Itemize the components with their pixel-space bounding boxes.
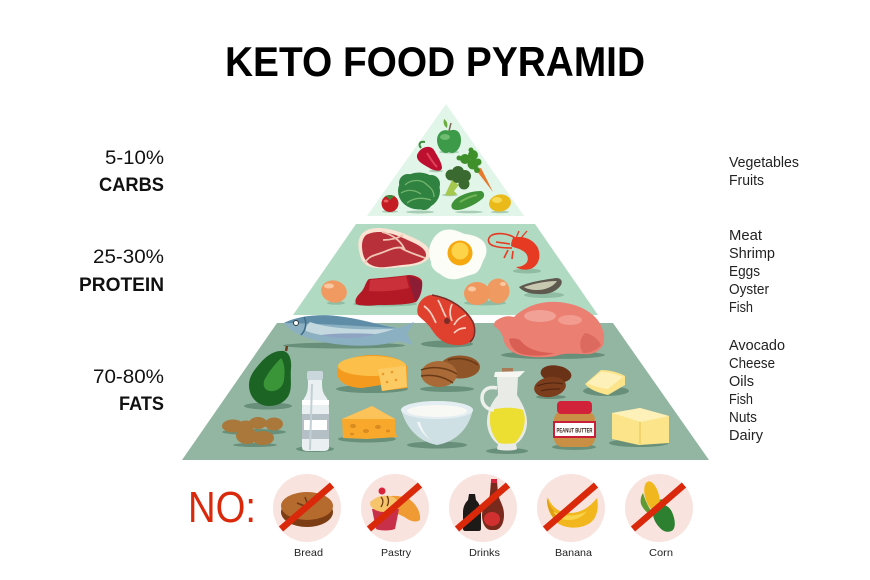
protein percentage label <box>79 247 164 296</box>
icon: almonds <box>533 363 573 400</box>
icon: lemon <box>488 193 512 213</box>
protein food list <box>729 228 775 316</box>
no item: banana: Banana <box>555 547 592 559</box>
fats food list: Avocado <box>729 338 785 354</box>
icon: raw chicken <box>494 302 605 359</box>
icon: salmon steak <box>417 295 475 348</box>
fats food list <box>729 338 785 444</box>
icon: peanuts <box>222 417 286 447</box>
icon: peanut butter jar: PEANUT BUTTER <box>556 428 593 434</box>
pyramid tier: carbs <box>367 104 524 216</box>
fats percentage label <box>93 367 164 415</box>
icon: butter small <box>583 370 629 396</box>
icon: broccoli <box>442 166 471 196</box>
pyramid tier: fats <box>182 295 709 460</box>
title: KETO FOOD PYRAMID <box>225 38 645 85</box>
protein food list: Meat <box>729 228 762 244</box>
icon: fried egg <box>429 229 486 279</box>
icon: shrimp <box>488 231 541 274</box>
icon: cheese wheel <box>336 355 408 393</box>
icon: two eggs <box>464 278 510 306</box>
no item: bread: Bread <box>294 547 323 559</box>
carbs percentage label <box>99 148 164 196</box>
protein food list: Shrimp <box>729 246 775 262</box>
fats food list: Fish <box>729 392 753 408</box>
icon: marbled steak <box>358 228 430 268</box>
fats food list: Oils <box>729 374 754 390</box>
fats food list: Cheese <box>729 356 775 372</box>
pyramid tier: protein <box>293 224 598 315</box>
fats food list: Nuts <box>729 410 757 426</box>
icon: apple <box>437 119 461 154</box>
icon: cabbage <box>398 172 440 214</box>
protein food list: Fish <box>729 300 753 316</box>
no item: corn: Corn <box>649 547 673 559</box>
carbs food list: Fruits <box>729 173 764 189</box>
icon: oyster <box>519 278 564 298</box>
icon: butter block <box>609 408 669 447</box>
icon: milk bottle <box>296 371 334 452</box>
carbs food list: Vegetables <box>729 155 799 171</box>
no item: pastry: Pastry <box>381 547 412 559</box>
icon: red beef cut <box>353 275 422 306</box>
carbs percentage label: CARBS <box>99 175 164 196</box>
fats percentage label: FATS <box>119 394 164 415</box>
protein food list: Eggs <box>729 264 760 280</box>
icon: cheese wedge <box>338 406 397 442</box>
carbs food list <box>729 155 799 189</box>
carbs percentage label: 5-10% <box>105 148 164 169</box>
icon: tomato <box>382 195 398 213</box>
fats percentage label: 70-80% <box>93 367 164 388</box>
no item: bread <box>273 474 341 559</box>
icon: whole fish <box>283 315 414 348</box>
icon: carrot <box>456 148 493 192</box>
protein percentage label: 25-30% <box>93 247 164 268</box>
no item: drinks <box>449 474 517 559</box>
icon: peanut butter jar <box>552 401 596 450</box>
NO label: NO: <box>188 483 256 532</box>
icon: single egg <box>319 278 349 305</box>
no item: pastry <box>361 474 429 559</box>
icon: avocado <box>244 346 292 410</box>
icon: oil carafe <box>482 368 528 454</box>
icon: cucumber <box>451 191 484 213</box>
no item: corn <box>625 474 693 559</box>
icon: red pepper <box>417 142 443 172</box>
protein percentage label: PROTEIN <box>79 275 164 296</box>
no item: drinks: Drinks <box>469 547 500 559</box>
icon: walnuts <box>420 356 480 392</box>
protein food list: Oyster <box>729 282 769 298</box>
fats food list: Dairy <box>729 428 764 444</box>
icon: bowl <box>401 401 473 448</box>
no item: banana <box>537 474 605 559</box>
